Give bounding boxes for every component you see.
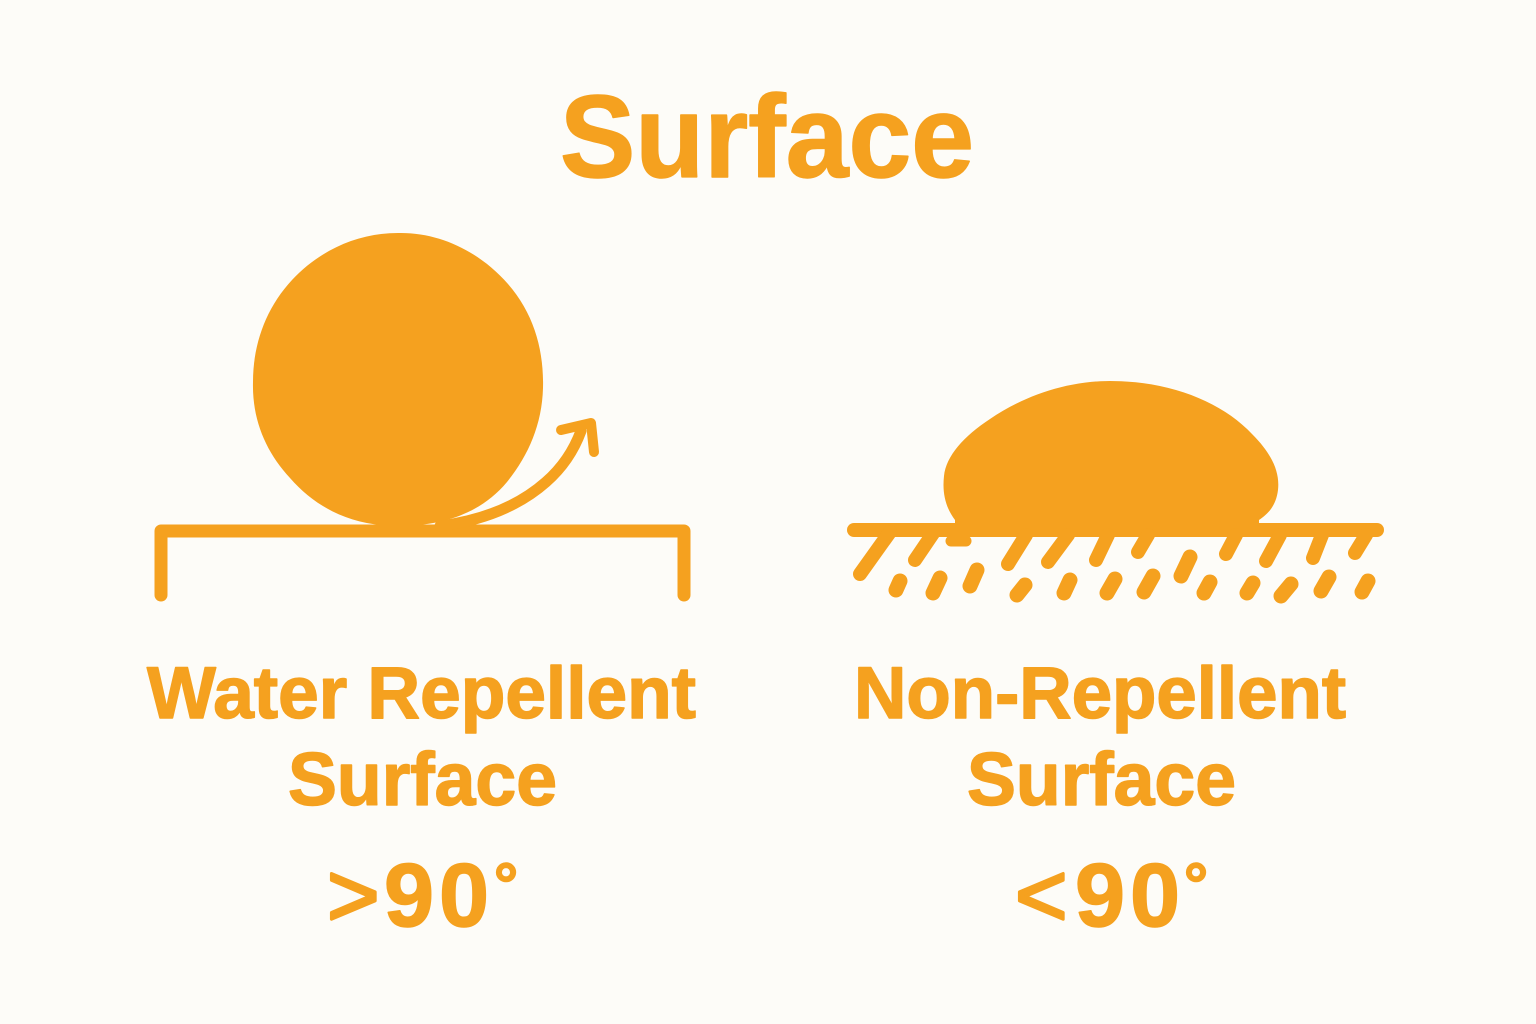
label: greater than 90 degrees: °	[494, 851, 518, 918]
label: greater than 90 degrees: 0	[439, 846, 489, 946]
icon: porous surface with absorbed water	[854, 530, 1377, 596]
label: greater than 90 degrees: >	[327, 846, 380, 946]
label: less than 90 degrees: 0	[1130, 846, 1180, 946]
label: non-repellent surface: Non-Repellent	[854, 653, 1346, 734]
panel: water repellent surface	[147, 233, 696, 946]
label: less than 90 degrees: <	[1015, 846, 1068, 946]
label: water repellent surface: Water Repellent	[147, 653, 696, 734]
arrow: droplet rolling off	[440, 423, 594, 526]
label: non-repellent surface	[854, 653, 1346, 821]
panel: non-repellent surface	[854, 381, 1377, 946]
label: water repellent surface: Surface	[288, 737, 557, 821]
label: less than 90 degrees: 9	[1075, 846, 1125, 946]
icon: flat surface bracket	[161, 531, 684, 595]
label: less than 90 degrees: °	[1184, 851, 1208, 918]
label: non-repellent surface: Surface	[967, 737, 1236, 821]
icon: flattened water droplet	[943, 381, 1278, 532]
title: Surface	[560, 71, 974, 202]
icon: round water droplet	[253, 233, 543, 526]
label: greater than 90 degrees: 9	[384, 846, 434, 946]
label: water repellent surface	[147, 653, 696, 821]
